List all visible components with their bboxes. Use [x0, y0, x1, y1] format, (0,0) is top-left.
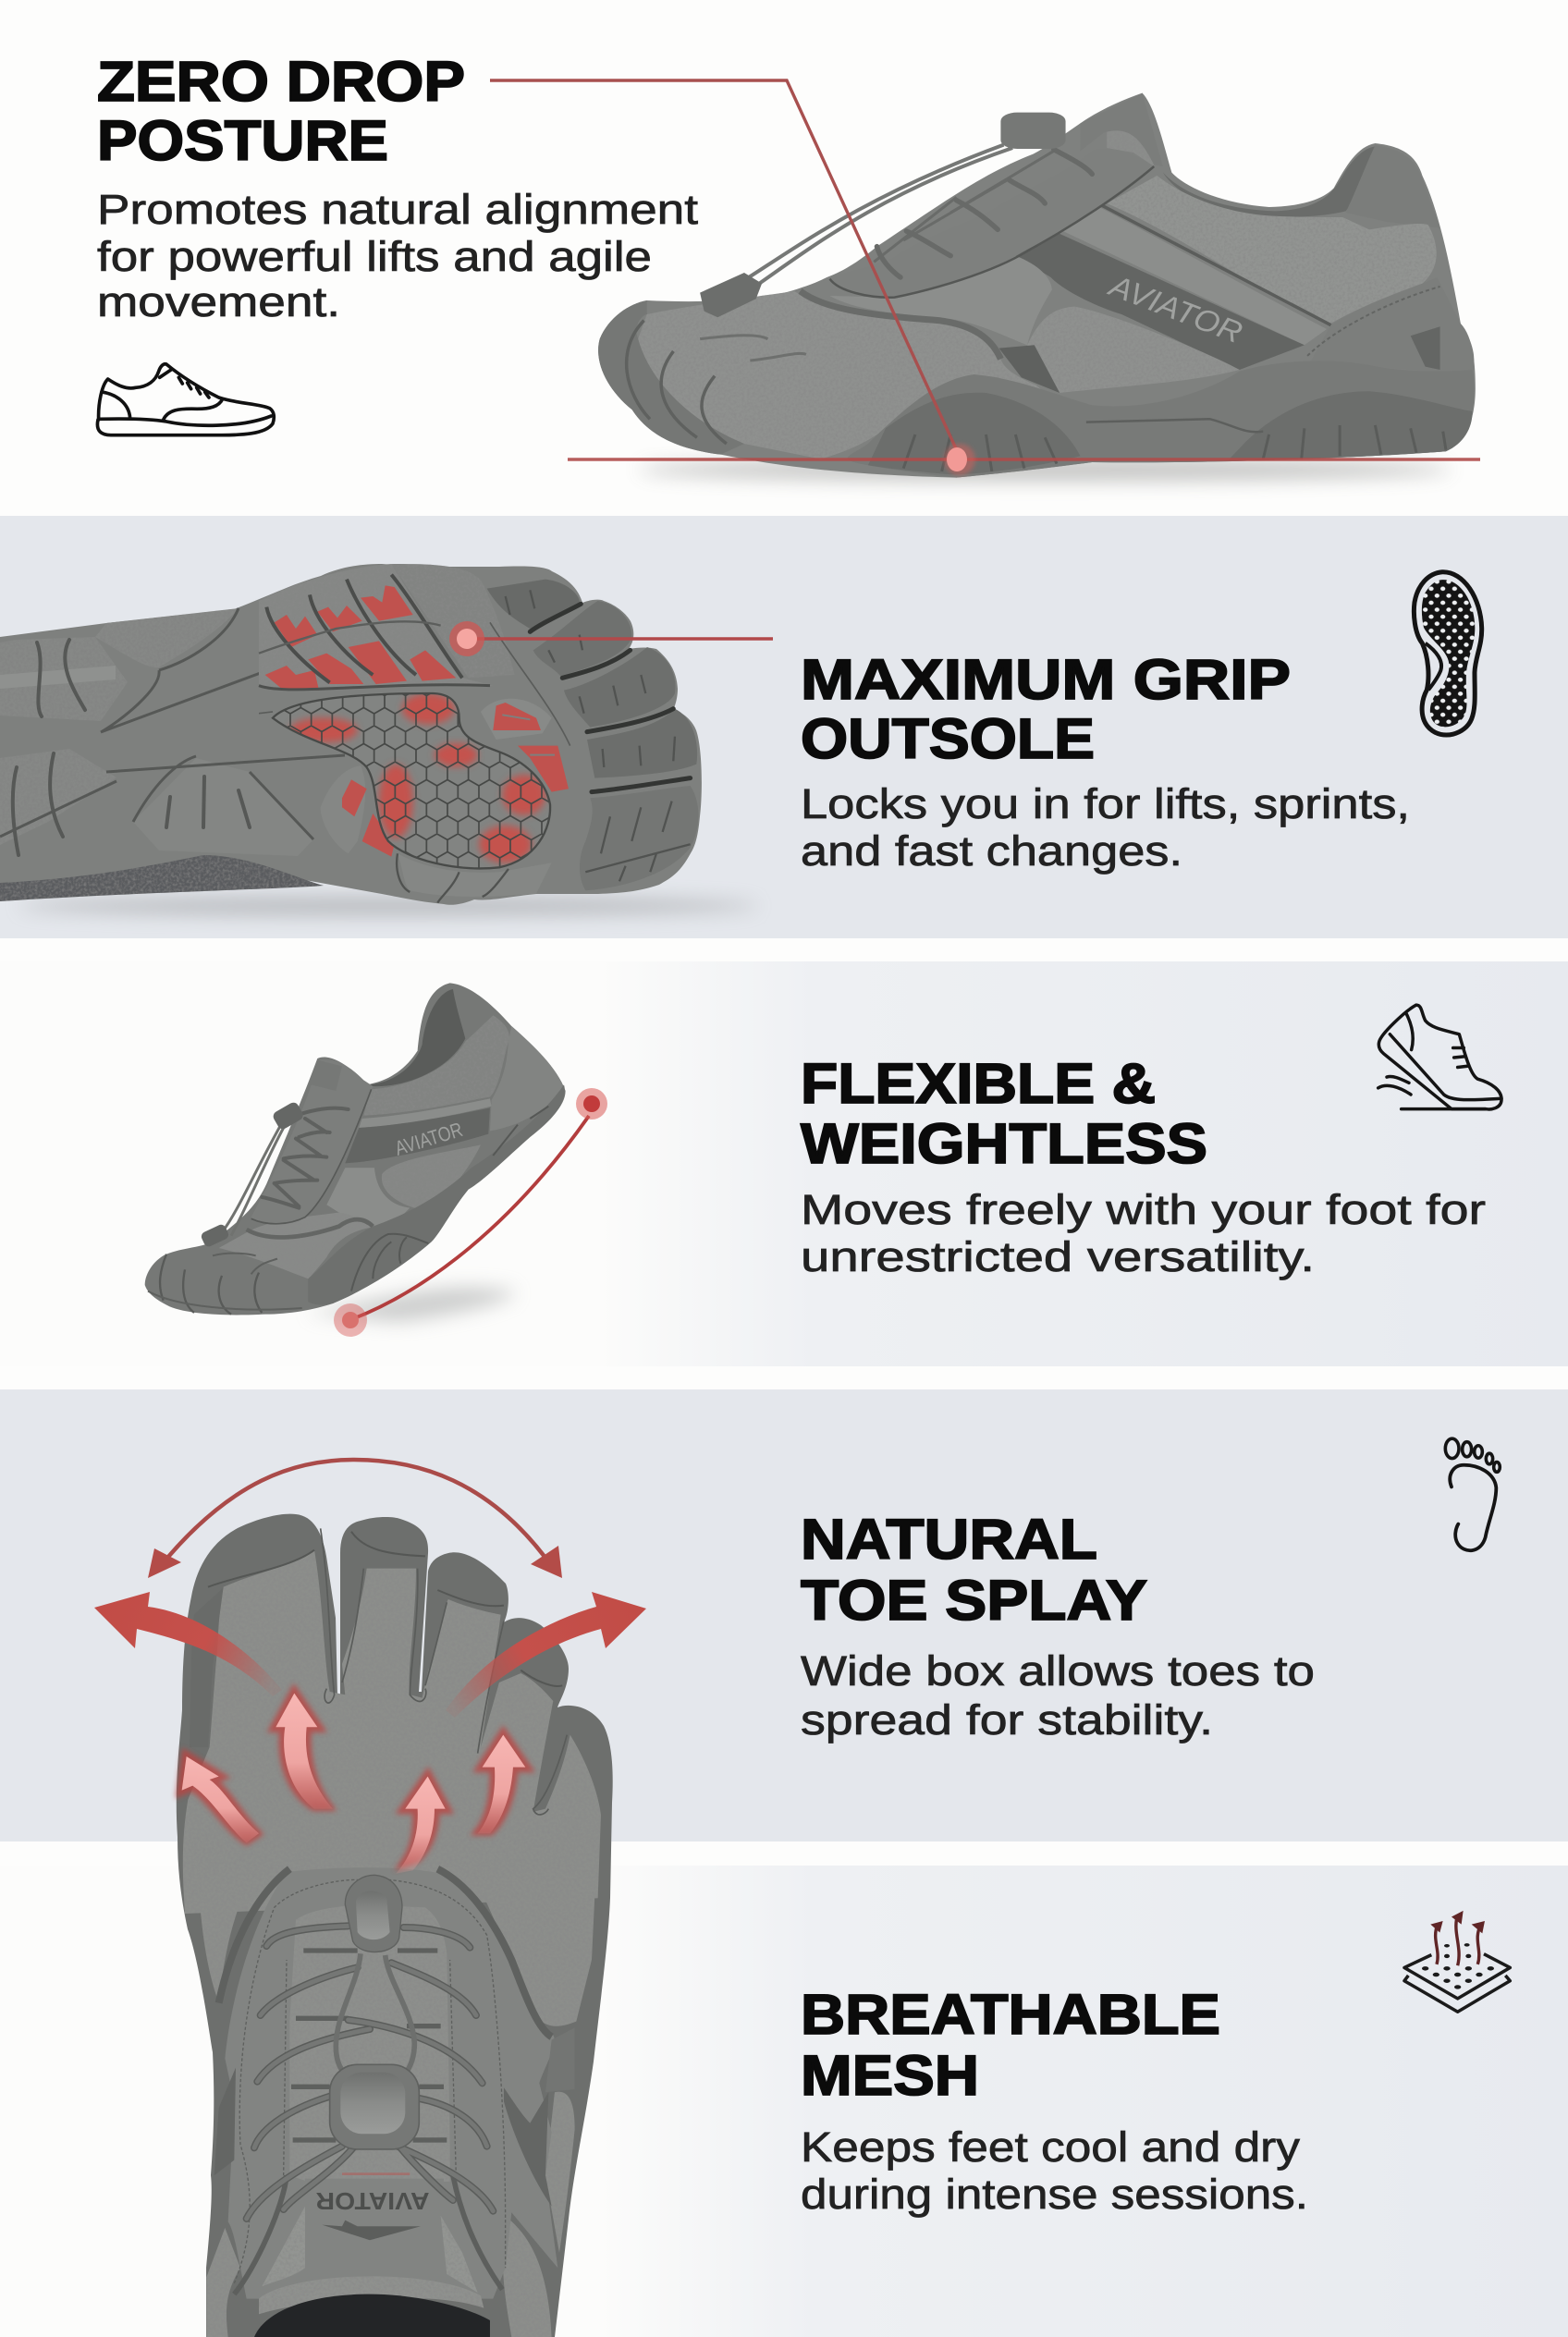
- lace toggle lower: [330, 2064, 419, 2149]
- heading: ZERO DROP: [97, 50, 465, 113]
- body text: movement.: [97, 278, 340, 325]
- arch and heel pads: [0, 608, 370, 856]
- toes: [160, 1254, 262, 1315]
- collar lining: [1163, 146, 1375, 217]
- product photo: flexed shoe: [145, 983, 566, 1322]
- body text: [801, 1186, 1486, 1280]
- heading: MESH: [801, 2044, 979, 2107]
- heading: [801, 648, 1291, 770]
- body text: Moves freely with your foot for: [801, 1186, 1486, 1233]
- leather side panel: [829, 256, 1052, 345]
- body text: for powerful lifts and agile: [97, 233, 652, 280]
- sole: [848, 361, 1475, 478]
- heading: WEIGHTLESS: [801, 1112, 1207, 1175]
- product photo: outsole: [0, 564, 758, 915]
- logo text on tongue: AVIATOR: [315, 2187, 429, 2215]
- side pads: [321, 765, 365, 853]
- heading: OUTSOLE: [801, 707, 1095, 770]
- laces: [222, 1109, 289, 1236]
- panel: maximum grip outsole: [0, 516, 1568, 938]
- cord lock: [271, 1101, 305, 1131]
- body text: and fast changes.: [801, 827, 1182, 875]
- callout: zero drop lines and dot: [490, 80, 1480, 475]
- red chevron lugs: [265, 585, 456, 691]
- cord lock upper: [1000, 113, 1066, 149]
- icon: footprint: [1445, 1438, 1500, 1550]
- brand mark on tongue: [322, 2221, 421, 2240]
- heel counter: [1310, 277, 1474, 372]
- lace panel: [225, 1867, 557, 2299]
- bungee cords: [724, 145, 1012, 296]
- hex tread: [268, 691, 555, 875]
- cord lock lower: [700, 273, 762, 317]
- product photo: top view shoe: [177, 1514, 613, 2337]
- heading: FLEXIBLE &: [801, 1052, 1156, 1115]
- body text: [801, 2123, 1308, 2218]
- felt collar: [1107, 176, 1437, 324]
- mid felt: [1027, 307, 1240, 393]
- callout: grip pointer: [449, 621, 773, 656]
- arrows: outward toe splay: [94, 1592, 646, 1718]
- arrows: pink pressure glow: [182, 1694, 525, 1874]
- arrow: top spread arc: [148, 1460, 562, 1578]
- toes and forefoot felt: [183, 1528, 601, 1914]
- body text: Keeps feet cool and dry: [801, 2123, 1301, 2171]
- body text: Locks you in for lifts, sprints,: [801, 780, 1410, 827]
- outsole band: [308, 1084, 565, 1305]
- panel: zero drop posture: [0, 0, 1568, 516]
- body text: spread for stability.: [801, 1696, 1213, 1744]
- heading: [801, 1508, 1147, 1632]
- forefoot pads: [259, 564, 493, 687]
- body text: [97, 186, 699, 325]
- toe felt: [638, 291, 1045, 459]
- heading: BREATHABLE: [801, 1983, 1220, 2046]
- heading: [97, 50, 465, 172]
- icon: running shoe: [1378, 1005, 1501, 1109]
- panel: breathable mesh: [0, 1866, 1568, 2337]
- toe ridges: [598, 300, 744, 455]
- body text: during intense sessions.: [801, 2171, 1308, 2218]
- product photo: side view shoe: [598, 93, 1476, 481]
- tongue felt: [289, 1904, 450, 2182]
- panel: flexible and weightless: [0, 961, 1568, 1366]
- vamp and lacing: [197, 1865, 596, 2337]
- body text: Wide box allows toes to: [801, 1647, 1315, 1695]
- body text: unrestricted versatility.: [801, 1233, 1315, 1280]
- icon: breathable layers: [1404, 1911, 1510, 2012]
- icon: sneaker outline: [97, 364, 274, 435]
- body text: [801, 1647, 1315, 1744]
- heading: NATURAL: [801, 1508, 1097, 1571]
- callout: flex curve: [334, 1088, 607, 1337]
- heading: [801, 1052, 1207, 1175]
- lace toggle upper: [345, 1875, 402, 1952]
- body text: [801, 780, 1410, 875]
- heading: [801, 1983, 1220, 2107]
- logo text on flexed shoe: AVIATOR: [392, 1118, 465, 1160]
- logo text on shoe: AVIATOR: [1103, 267, 1247, 349]
- logo stripes: [1060, 206, 1327, 345]
- panel: natural toe splay: [0, 1389, 1568, 2337]
- body text: Promotes natural alignment: [97, 186, 699, 233]
- toes: [487, 580, 698, 890]
- heading: TOE SPLAY: [801, 1569, 1147, 1632]
- lace cords: [234, 2175, 502, 2294]
- knit upper edge: [0, 855, 324, 901]
- heading: MAXIMUM GRIP: [801, 648, 1291, 711]
- icon: sole tread: [1414, 572, 1482, 735]
- lacing panel: [829, 149, 1154, 298]
- heading: POSTURE: [97, 109, 388, 172]
